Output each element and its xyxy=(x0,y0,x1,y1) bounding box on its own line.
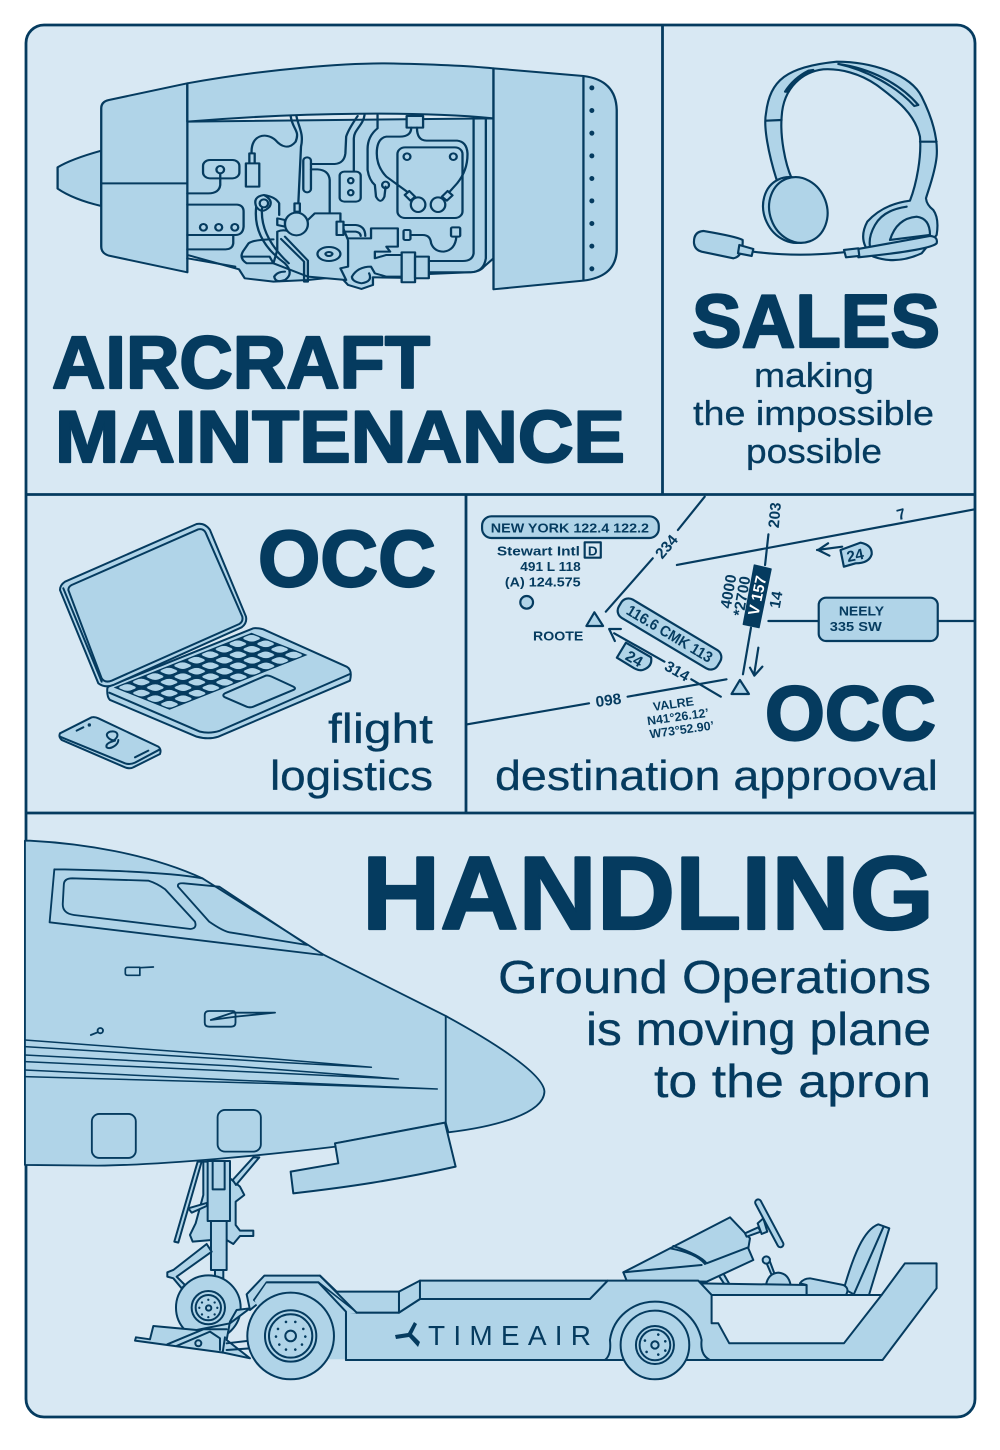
icon: headset xyxy=(694,62,937,260)
label: Neely xyxy=(819,598,938,641)
panel: occ flight logistics xyxy=(59,514,436,799)
label: New York frequency xyxy=(482,516,659,538)
panel: handling xyxy=(25,836,937,1379)
label: Stewart Intl airport: 491 L 118 xyxy=(520,559,581,574)
illustration: nose landing gear xyxy=(167,1157,259,1340)
chart: aeronautical map: 24 xyxy=(845,546,866,566)
label: Stewart Intl airport: (A) 124.575 xyxy=(505,575,581,590)
text: flight logistics: flight xyxy=(328,705,433,752)
text: sales subtitle: the impossible xyxy=(693,395,934,433)
heading: occ: OCC xyxy=(765,671,936,757)
chart: aeronautical map: 7 xyxy=(895,506,908,524)
illustration: gear door xyxy=(291,1123,456,1193)
label: Stewart Intl airport: D xyxy=(588,543,598,558)
illustration: TimeAir tug xyxy=(135,1198,937,1379)
heading: aircraft maintenance: MAINTENANCE xyxy=(55,397,625,478)
panel: aircraft maintenance xyxy=(52,63,625,478)
text: handling subtitle: Ground Operations xyxy=(498,951,931,1003)
label: Valre waypoint: N41°26.12’ xyxy=(646,706,710,728)
text: handling subtitle: to the apron xyxy=(654,1055,931,1107)
chart: aeronautical map: 098 xyxy=(595,691,623,711)
text: handling subtitle xyxy=(498,951,931,1107)
label: Neely: 335 SW xyxy=(830,619,882,634)
panel: sales xyxy=(692,62,940,471)
text: sales subtitle: possible xyxy=(746,433,882,471)
chart: aeronautical map: 234 xyxy=(652,532,682,562)
heading: sales: SALES xyxy=(692,279,940,363)
heading: handling: HANDLING xyxy=(362,836,934,952)
chart: aeronautical map: 24 xyxy=(622,648,646,671)
icon: laptop and phone xyxy=(59,524,351,768)
heading: aircraft maintenance: AIRCRAFT xyxy=(52,321,430,404)
label: Valre waypoint xyxy=(644,692,715,741)
label: CMK frequency: 116.6 CMK 113 xyxy=(623,602,715,667)
heading: occ: OCC xyxy=(258,514,436,603)
text: handling subtitle: is moving plane xyxy=(586,1003,931,1055)
label: Valre waypoint: VALRE xyxy=(652,694,695,714)
text: flight logistics: logistics xyxy=(270,752,433,799)
text: flight logistics xyxy=(270,705,433,799)
label: V157 airway xyxy=(743,565,771,628)
chart: aeronautical map: *2700 xyxy=(731,575,754,617)
tug cab controls xyxy=(623,1198,889,1295)
logo: TimeAir: TIMEAIR xyxy=(428,1320,591,1351)
text: destination approoval: destination approoval xyxy=(495,752,938,799)
tug chassis xyxy=(135,1263,937,1379)
label: Neely: NEELY xyxy=(839,604,884,619)
label: New York frequency: NEW YORK 122.4 122.2 xyxy=(491,520,649,535)
label: Valre waypoint: W73°52.90’ xyxy=(649,719,715,741)
heading: aircraft maintenance xyxy=(52,321,625,478)
panel: occ destination approval xyxy=(467,497,975,799)
label: V157 airway: V 157 xyxy=(745,574,770,617)
text: sales subtitle: making xyxy=(754,357,874,395)
label: Stewart Intl airport xyxy=(497,542,601,609)
chart: aeronautical map: 14 xyxy=(767,590,787,610)
chart: aeronautical map: 203 xyxy=(766,502,785,529)
icon: engine cutaway xyxy=(58,63,617,289)
chart: aeronautical map: ROOTE xyxy=(533,629,583,644)
chart: aeronautical map: 4000 xyxy=(718,573,740,610)
chart: aeronautical map: 314 xyxy=(661,658,693,686)
chart: aeronautical map xyxy=(467,497,975,741)
label: Stewart Intl airport: Stewart Intl xyxy=(497,544,580,559)
text: sales subtitle xyxy=(693,357,934,471)
illustration: aircraft nose xyxy=(25,841,544,1166)
